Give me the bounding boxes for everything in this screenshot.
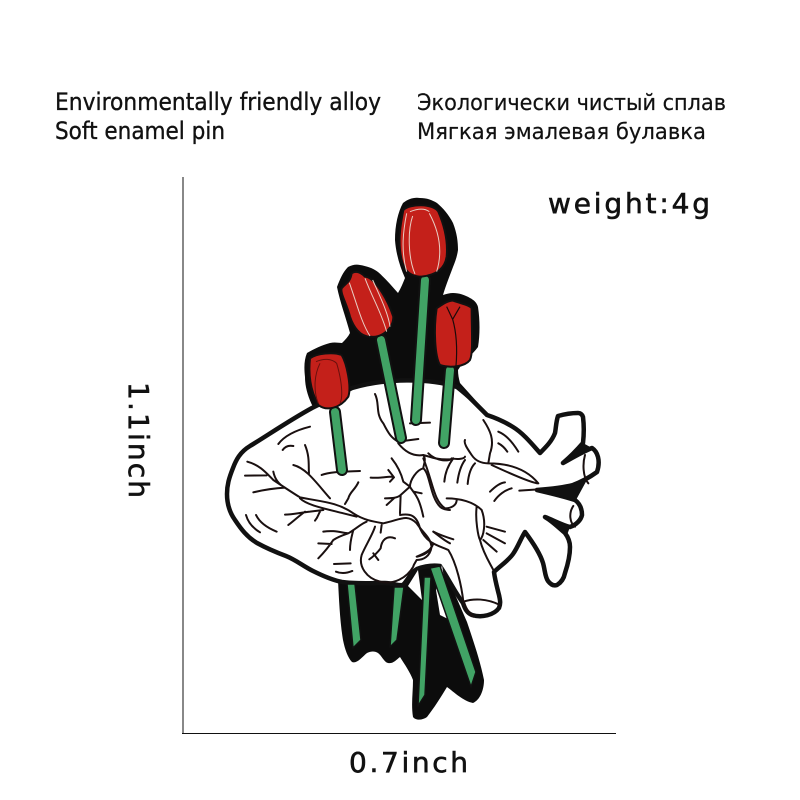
veins: right side and vessels <box>400 420 588 617</box>
height label: 1.1inch <box>122 382 155 498</box>
tulip: left upper <box>341 272 393 337</box>
enamel pin: heart with tulips <box>227 198 599 720</box>
text block: english material: Environmentally friendly alloy <box>55 88 381 116</box>
text block: russian material: Экологически чистый сплав <box>417 91 726 116</box>
text block: english material: Soft enamel pin <box>55 117 225 145</box>
width label: 0.7inch <box>349 746 468 779</box>
black backing behind tulips <box>304 198 487 420</box>
text block: english material <box>55 88 381 145</box>
veins: left side <box>245 394 450 583</box>
height dimension axis <box>182 177 184 734</box>
width dimension axis <box>182 732 616 734</box>
heart body <box>227 380 599 616</box>
tulip: left lower <box>309 353 349 408</box>
stems: lower <box>347 566 476 706</box>
tulip: right <box>435 301 472 367</box>
black backing below heart <box>338 560 484 720</box>
tulip: top <box>400 205 447 277</box>
stems: upper <box>335 280 450 470</box>
text block: russian material <box>417 91 726 145</box>
black wedges between vessels <box>537 443 592 535</box>
text block: russian material: Мягкая эмалевая булавка <box>417 120 706 145</box>
tulips <box>309 205 472 408</box>
weight label: weight:4g <box>548 187 710 220</box>
white gaps between lower stems <box>408 565 450 620</box>
